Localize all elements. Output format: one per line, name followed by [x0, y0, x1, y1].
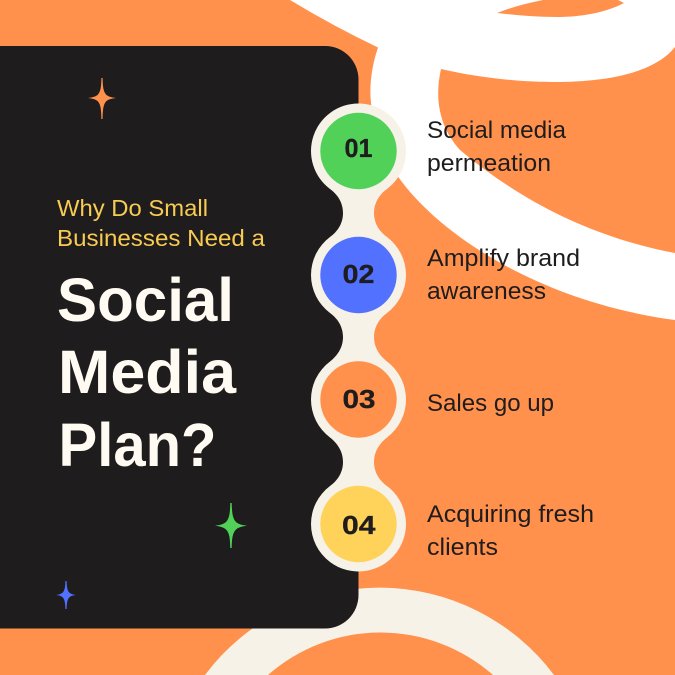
item 01: [320, 113, 567, 189]
numbered chain connector: [311, 104, 406, 571]
item 01: 01: [344, 133, 372, 163]
item 04: 04: [342, 510, 376, 540]
item 03: 03: [342, 384, 376, 414]
item 02: Amplify brand: [427, 245, 580, 272]
title: Social: [57, 266, 234, 334]
item 01: permeation: [427, 150, 551, 177]
panel: dark title panel: [0, 46, 358, 628]
title: [57, 266, 237, 479]
beige ring at bottom: [205, 588, 554, 675]
item 02: awareness: [427, 278, 546, 305]
white swoosh background shape: [290, 0, 675, 320]
icon: blue sparkle: [56, 581, 76, 609]
subtitle: Why Do Small: [57, 195, 208, 221]
icon: orange sparkle: [88, 78, 116, 119]
subtitle: [57, 195, 265, 251]
item 03: [320, 361, 554, 438]
item 01: Social media: [427, 117, 567, 144]
item 04: clients: [427, 534, 498, 561]
item 04: [320, 486, 594, 562]
title: Media: [58, 338, 237, 406]
item 03: Sales go up: [427, 390, 554, 417]
title: Plan?: [58, 411, 216, 479]
item 02: [320, 237, 580, 313]
subtitle: Businesses Need a: [57, 225, 265, 251]
item 02: 02: [342, 259, 374, 289]
icon: green sparkle: [215, 503, 247, 548]
item 04: Acquiring fresh: [427, 501, 594, 528]
